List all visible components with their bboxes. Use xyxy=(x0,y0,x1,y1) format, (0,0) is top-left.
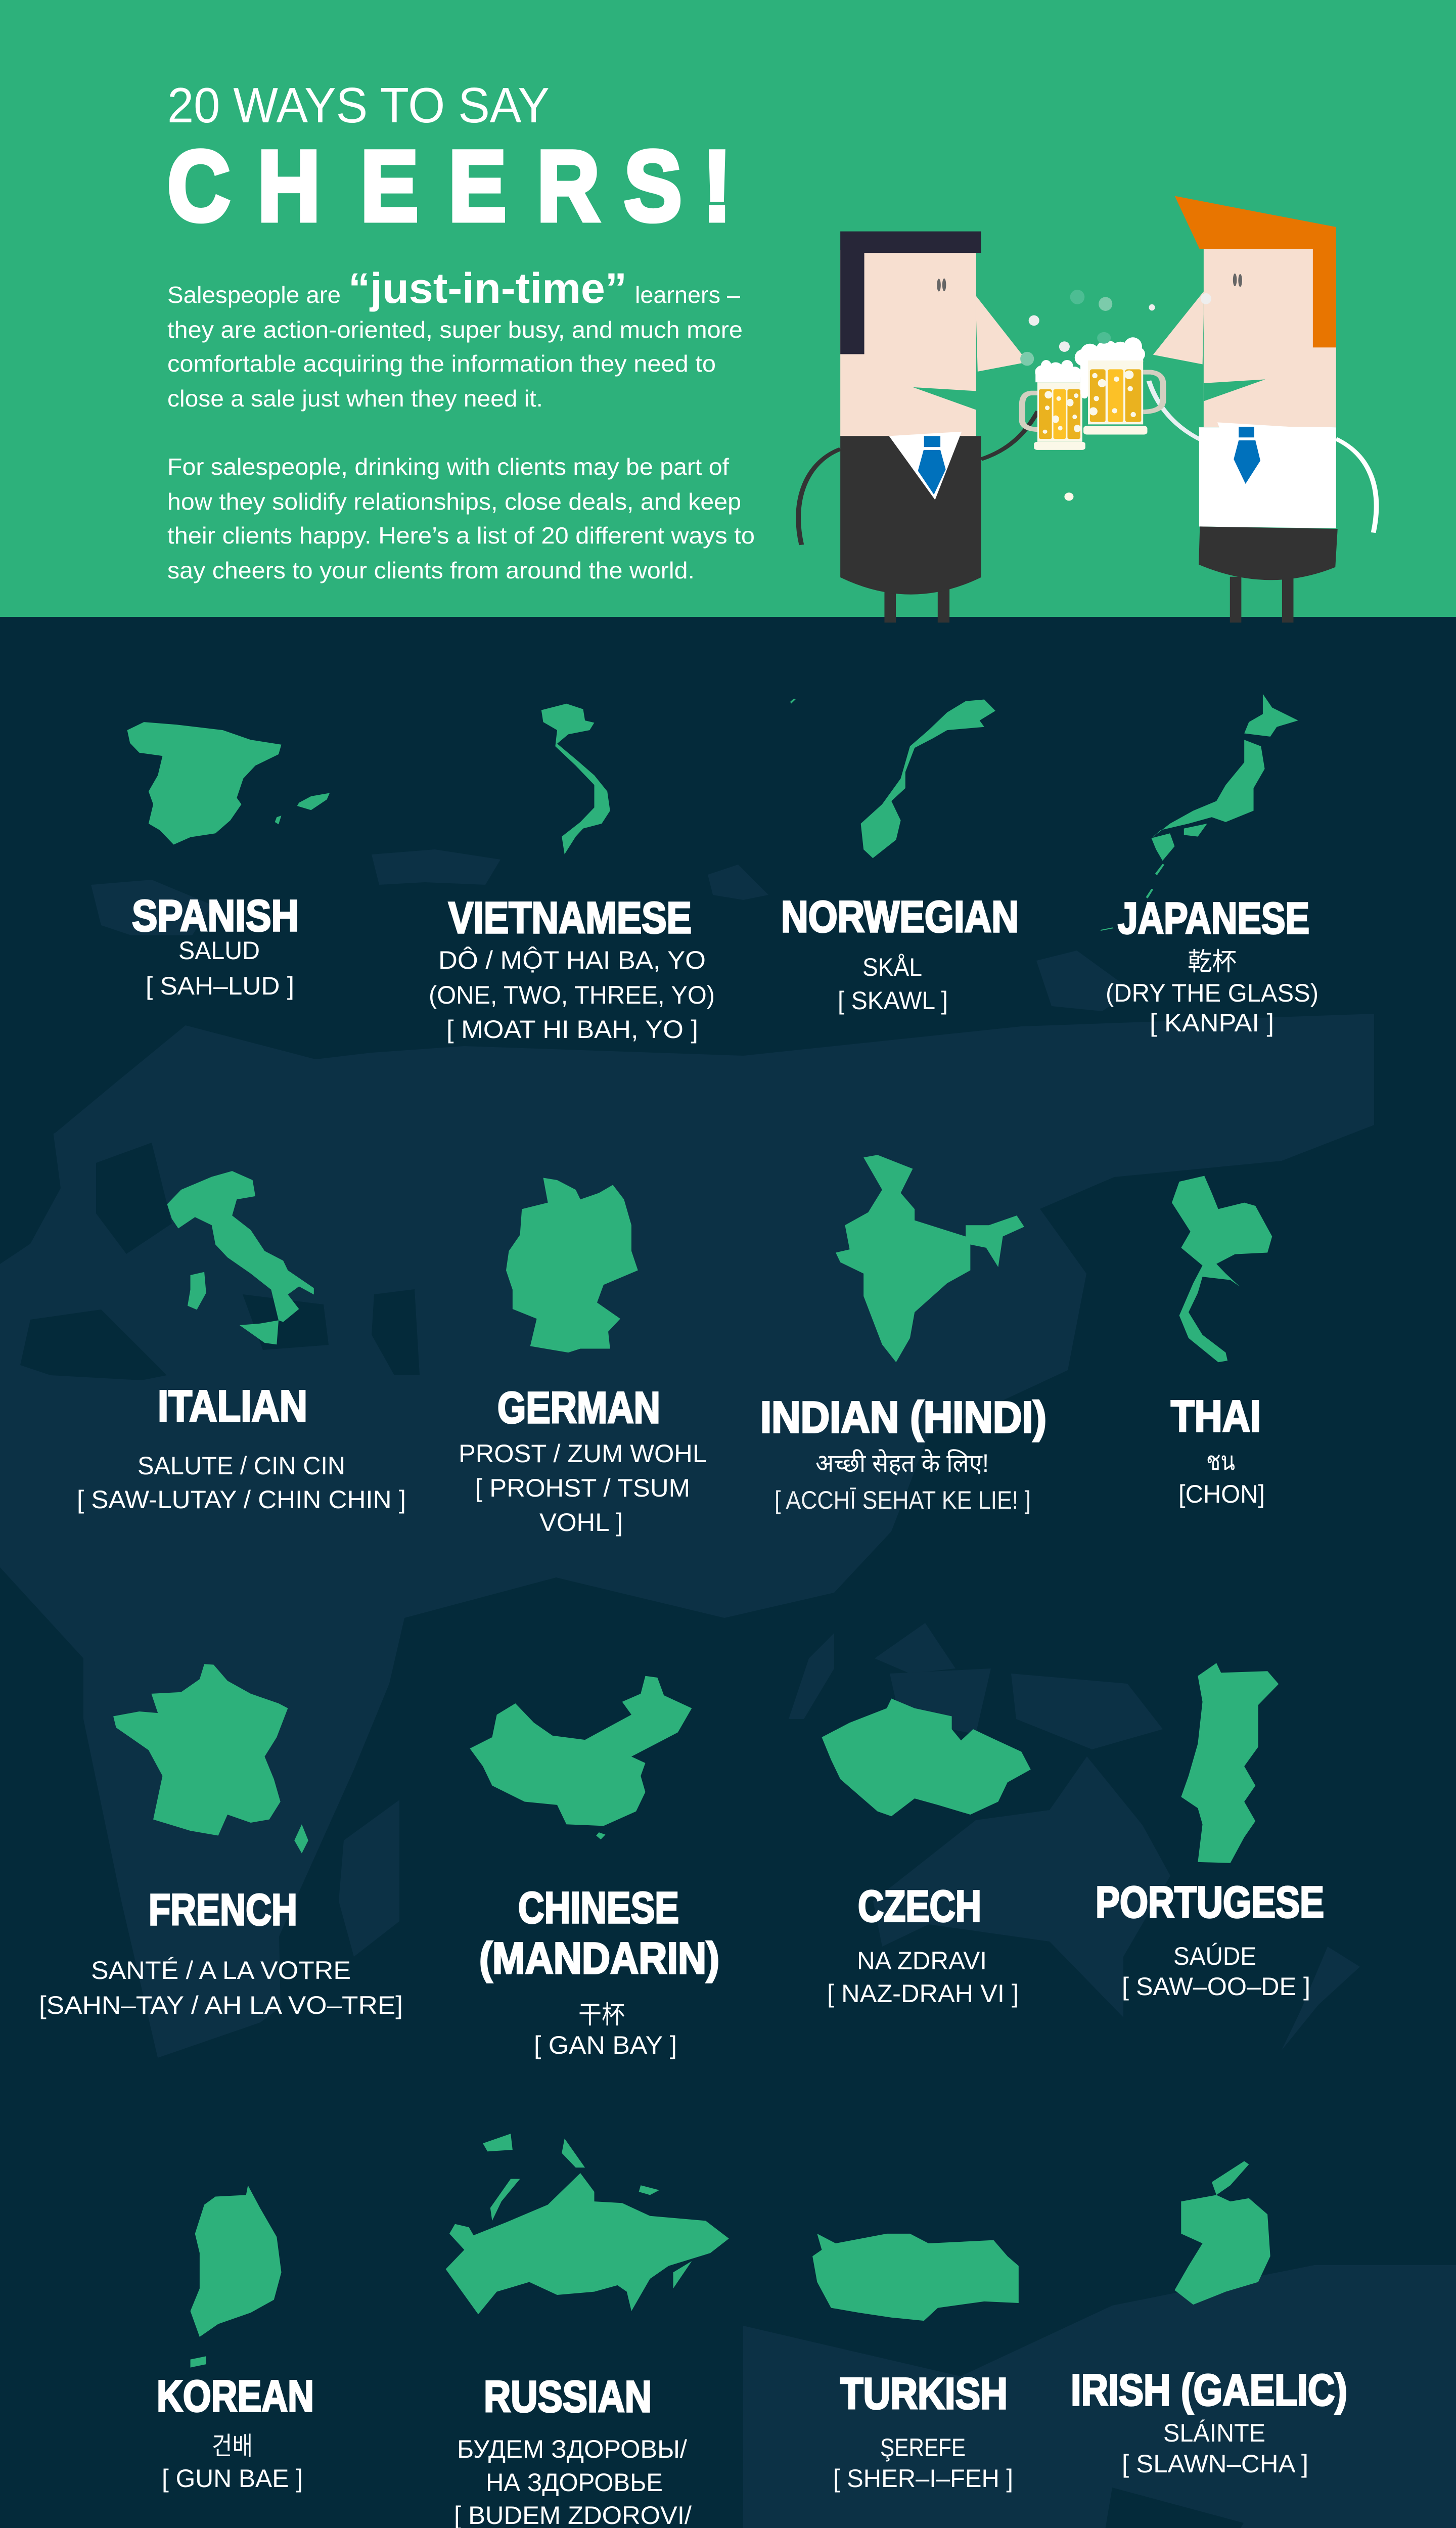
row 2 xyxy=(77,1155,1272,1537)
panel: Chinese (Mandarin) xyxy=(470,1676,719,2059)
panel: Japanese: JAPANESE xyxy=(1118,894,1309,943)
panel: Czech: CZECH xyxy=(858,1882,981,1931)
background world map xyxy=(0,849,1456,2528)
panel: Italian: SALUTE / CIN CIN xyxy=(138,1452,345,1480)
panel: Korean: KOREAN xyxy=(157,2372,314,2421)
map: India xyxy=(836,1155,1024,1362)
panel: Vietnamese: VIETNAMESE xyxy=(448,893,692,942)
panel: Korean: 건배 xyxy=(212,2426,253,2462)
intro text block: For salespeople, drinking with clients may be part of xyxy=(167,454,729,480)
header band xyxy=(0,0,1456,617)
panel: Norwegian: NORWEGIAN xyxy=(781,892,1019,941)
panel: Czech xyxy=(822,1698,1031,2008)
intro text block: they are action-oriented, super busy, and much more xyxy=(167,317,743,343)
panel: Irish (Gaelic): [ SLAWN–CHA ] xyxy=(1122,2450,1308,2478)
panel: Portugese: SAÚDE xyxy=(1173,1942,1256,1970)
panel: Turkish xyxy=(812,2234,1019,2493)
row 4 xyxy=(157,2134,1347,2528)
panel: Norwegian: [ SKAWL ] xyxy=(838,986,948,1015)
map: Turkey xyxy=(812,2234,1019,2321)
map: Italy xyxy=(167,1171,314,1344)
map: South Korea xyxy=(191,2185,282,2368)
beer splash bubbles xyxy=(1020,290,1211,501)
panel: Indian (Hindi): [ ACCHĪ SEHAT KE LIE! ] xyxy=(775,1486,1031,1514)
panel: Russian: НА ЗДОРОВЬЕ xyxy=(486,2468,663,2497)
intro text block: how they solidify relationships, close deals, and keep xyxy=(167,488,741,515)
panel: French: SANTÉ / A LA VOTRE xyxy=(91,1956,351,1984)
panel: Vietnamese: [ MOAT HI BAH, YO ] xyxy=(446,1015,698,1044)
panel: Portugese xyxy=(1096,1663,1324,2001)
panel: Japanese xyxy=(1100,694,1318,1037)
panel: Norwegian: SKÅL xyxy=(862,953,922,981)
map: Thailand xyxy=(1172,1176,1272,1362)
intro text block xyxy=(167,264,755,583)
character: dark-haired man xyxy=(798,232,1038,622)
title xyxy=(167,77,732,242)
panel: Indian (Hindi) xyxy=(760,1155,1046,1514)
intro text block: close a sale just when they need it. xyxy=(167,385,543,412)
panel: Japanese: (DRY THE GLASS) xyxy=(1106,979,1318,1007)
panel: Turkish: [ SHER–I–FEH ] xyxy=(833,2464,1013,2493)
panel: Irish (Gaelic): SLÁINTE xyxy=(1163,2419,1265,2447)
panel: French: FRENCH xyxy=(149,1885,297,1934)
panel: Italian: ITALIAN xyxy=(158,1382,307,1431)
map: Spain xyxy=(127,722,330,845)
panel: Chinese (Mandarin): CHINESE xyxy=(518,1883,679,1932)
panel: Czech: NA ZDRAVI xyxy=(857,1947,987,1975)
intro text block: Salespeople are xyxy=(167,282,341,308)
panel: German: [ PROHST / TSUM xyxy=(475,1474,690,1502)
map: Germany xyxy=(506,1178,638,1352)
panel: Chinese (Mandarin): 干杯 xyxy=(578,1995,625,2031)
panel: Russian: БУДЕМ ЗДОРОВЫ/ xyxy=(457,2435,687,2463)
map: Russia xyxy=(446,2134,729,2314)
intro text block: say cheers to your clients from around the world. xyxy=(167,557,695,583)
panel: Thai: ชน xyxy=(1206,1447,1235,1475)
map: Vietnam xyxy=(541,704,610,854)
row 3 xyxy=(39,1663,1324,2059)
row 1 xyxy=(127,694,1318,1044)
panel: Chinese (Mandarin): (MANDARIN) xyxy=(479,1934,719,1983)
map: Portugal xyxy=(1181,1663,1279,1863)
panel: Indian (Hindi): अच्छी सेहत के लिए! xyxy=(815,1449,989,1477)
panel: Russian: RUSSIAN xyxy=(484,2372,652,2421)
panel: Norwegian xyxy=(781,699,1019,1015)
panel: Chinese (Mandarin): [ GAN BAY ] xyxy=(534,2031,677,2059)
panel: Portugese: [ SAW–OO–DE ] xyxy=(1122,1972,1310,2001)
map: Ireland xyxy=(1174,2161,1270,2305)
icon: small beer mug xyxy=(1022,360,1085,450)
map: Norway xyxy=(790,699,995,858)
map: China xyxy=(470,1676,692,1839)
panel: Turkish: ŞEREFE xyxy=(880,2433,966,2462)
panel: Vietnamese: DÔ / MỘT HAI BA, YO xyxy=(438,946,706,974)
panel: Vietnamese xyxy=(429,704,715,1044)
panel: Japanese: 乾杯 xyxy=(1188,941,1237,978)
panel: French xyxy=(39,1664,403,2019)
panel: Thai: [CHON] xyxy=(1178,1480,1265,1508)
intro text block: comfortable acquiring the information they need to xyxy=(167,350,716,377)
panel: Spanish: SPANISH xyxy=(132,891,299,940)
intro text block: learners – xyxy=(635,282,740,308)
icon: large beer mug xyxy=(1075,337,1163,434)
panel: German: PROST / ZUM WOHL xyxy=(459,1439,707,1468)
panel: Korean xyxy=(157,2185,314,2493)
panel: Spanish xyxy=(127,722,330,1000)
panel: German: GERMAN xyxy=(497,1383,660,1432)
panel: Czech: [ NAZ-DRAH VI ] xyxy=(827,1979,1019,2008)
intro text block: their clients happy. Here’s a list of 20 different ways to xyxy=(167,522,755,549)
panel: Vietnamese: (ONE, TWO, THREE, YO) xyxy=(429,981,715,1009)
title: CHEERS! xyxy=(167,130,732,242)
illustration: two salespeople toasting xyxy=(798,196,1376,622)
character: orange-haired man xyxy=(1149,196,1376,622)
map: France xyxy=(113,1664,308,1854)
panel: French: [SAHN–TAY / AH LA VO–TRE] xyxy=(39,1991,403,2019)
panel: Irish (Gaelic): IRISH (GAELIC) xyxy=(1071,2366,1347,2415)
panel: German xyxy=(459,1178,707,1537)
intro text block: “just-in-time” xyxy=(348,264,627,312)
map: Czech Republic xyxy=(822,1698,1031,1816)
panel: Thai xyxy=(1171,1176,1272,1508)
panel: Turkish: TURKISH xyxy=(840,2369,1008,2418)
panel: Russian xyxy=(446,2134,729,2528)
panel: Korean: [ GUN BAE ] xyxy=(162,2464,303,2493)
panel: Italian xyxy=(77,1171,406,1514)
panel: Irish (Gaelic) xyxy=(1071,2161,1347,2478)
panel: Portugese: PORTUGESE xyxy=(1096,1878,1324,1927)
panel: Spanish: [ SAH–LUD ] xyxy=(146,972,294,1000)
panel: German: VOHL ] xyxy=(539,1508,623,1537)
panel: Thai: THAI xyxy=(1171,1392,1261,1441)
panel: Italian: [ SAW-LUTAY / CHIN CHIN ] xyxy=(77,1485,406,1514)
title: 20 WAYS TO SAY xyxy=(167,77,550,133)
panel: Spanish: SALUD xyxy=(178,936,260,965)
panel: Indian (Hindi): INDIAN (HINDI) xyxy=(760,1393,1046,1442)
map: Japan xyxy=(1100,694,1298,931)
panel: Japanese: [ KANPAI ] xyxy=(1150,1009,1274,1037)
